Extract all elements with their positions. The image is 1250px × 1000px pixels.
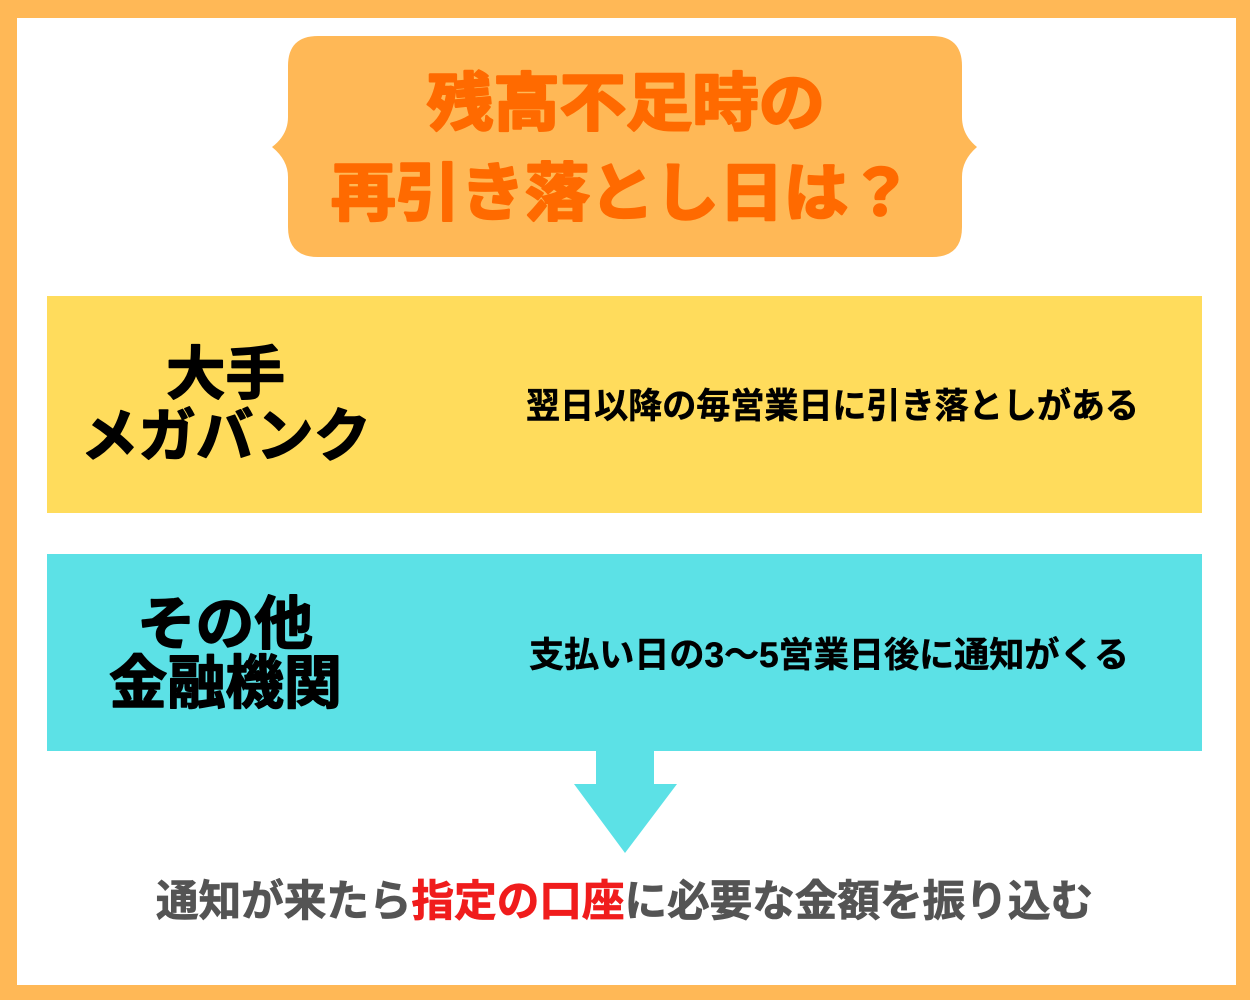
label: megabanks: メガバンク — [81, 404, 371, 469]
cyan band — [47, 554, 1202, 751]
label: megabanks: 大手 — [166, 342, 285, 407]
label: other institutions: その他 — [137, 592, 313, 657]
conclusion text: 通知が来たら指定の口座に必要な金額を振り込む — [156, 878, 1093, 926]
panel: major megabanks — [47, 296, 1202, 513]
arrow down — [574, 751, 677, 853]
description: other institutions: 支払い日の3～5営業日後に通知がくる — [529, 636, 1129, 675]
panel: other financial institutions — [47, 554, 1202, 751]
yellow band — [47, 296, 1202, 513]
title text: 残高不足時の — [427, 69, 825, 139]
title text — [331, 69, 913, 229]
title text: 再引き落とし日は？ — [331, 159, 913, 229]
label: other institutions — [109, 592, 342, 716]
title badge — [272, 36, 977, 257]
label: other institutions: 金融機関 — [109, 651, 342, 716]
description: megabanks: 翌日以降の毎営業日に引き落としがある — [526, 387, 1139, 426]
title background shape — [272, 36, 977, 257]
label: megabanks — [81, 342, 371, 469]
